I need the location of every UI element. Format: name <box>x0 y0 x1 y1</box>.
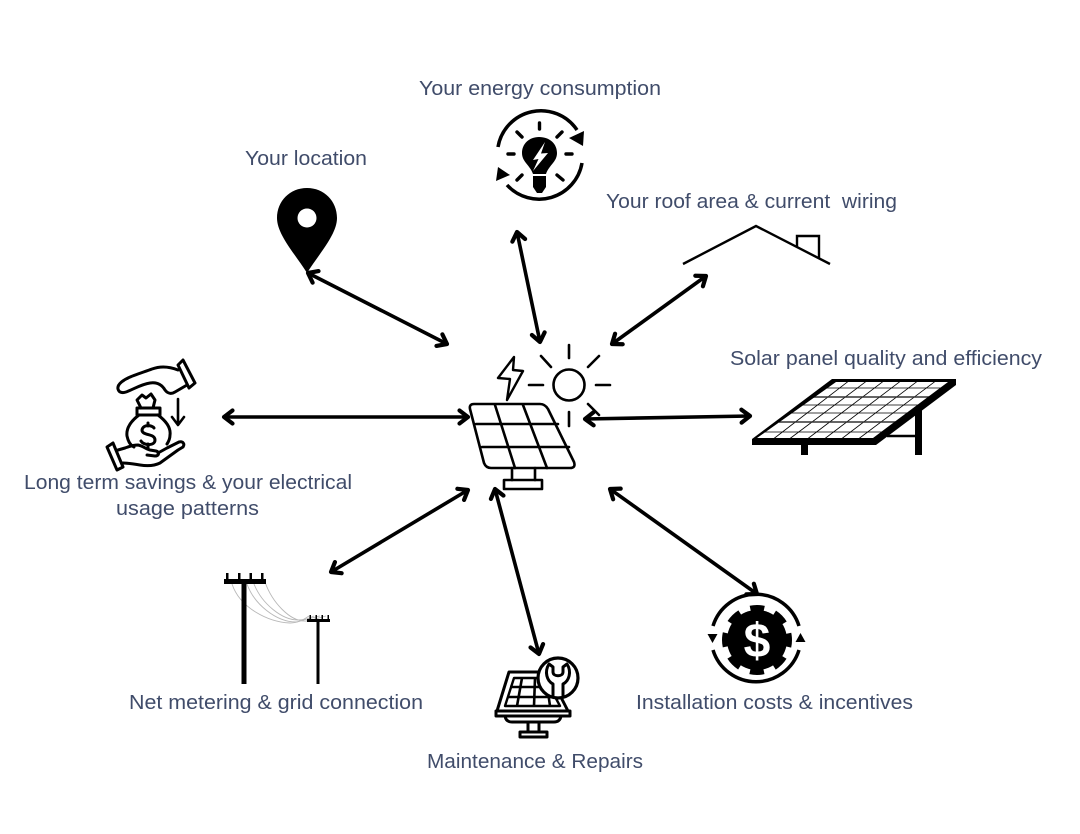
arrow: savings <box>224 415 468 419</box>
label: your energy consumption: Your energy consumption <box>419 78 661 100</box>
icon: location pin <box>277 188 337 273</box>
icon: gear with dollar <box>708 594 806 682</box>
icon: central solar panel with sun and bolt <box>470 345 610 489</box>
arrow: panel quality <box>585 416 750 419</box>
icon: hands with money bag <box>107 360 195 470</box>
arrow: energy consumption <box>517 232 540 342</box>
label: roof area and wiring: Your roof area & current wiring <box>606 191 897 213</box>
label: long term savings <box>24 472 352 520</box>
icon: solar panel with wrench <box>496 658 578 737</box>
icon: bulb with cycle arrows <box>496 111 584 199</box>
label: maintenance and repairs: Maintenance & Repairs <box>427 751 643 773</box>
icon: gear with dollar: $ <box>744 615 771 668</box>
label: installation costs: Installation costs & incentives <box>636 692 913 714</box>
arrow: maintenance <box>495 489 539 654</box>
icon: tilted solar panel <box>752 379 956 455</box>
icon: roof <box>683 226 830 264</box>
label: long term savings: Long term savings & your electrical <box>24 472 352 494</box>
arrow: net metering <box>331 490 468 572</box>
arrow: installation costs <box>610 489 757 594</box>
arrow: roof <box>612 276 706 344</box>
label: your location: Your location <box>245 148 367 170</box>
label: net metering: Net metering & grid connection <box>129 692 423 714</box>
label: long term savings: usage patterns <box>116 498 259 520</box>
arrow: location <box>308 273 447 344</box>
icon: utility poles <box>224 573 330 684</box>
label: solar panel quality: Solar panel quality and efficiency <box>730 348 1042 370</box>
